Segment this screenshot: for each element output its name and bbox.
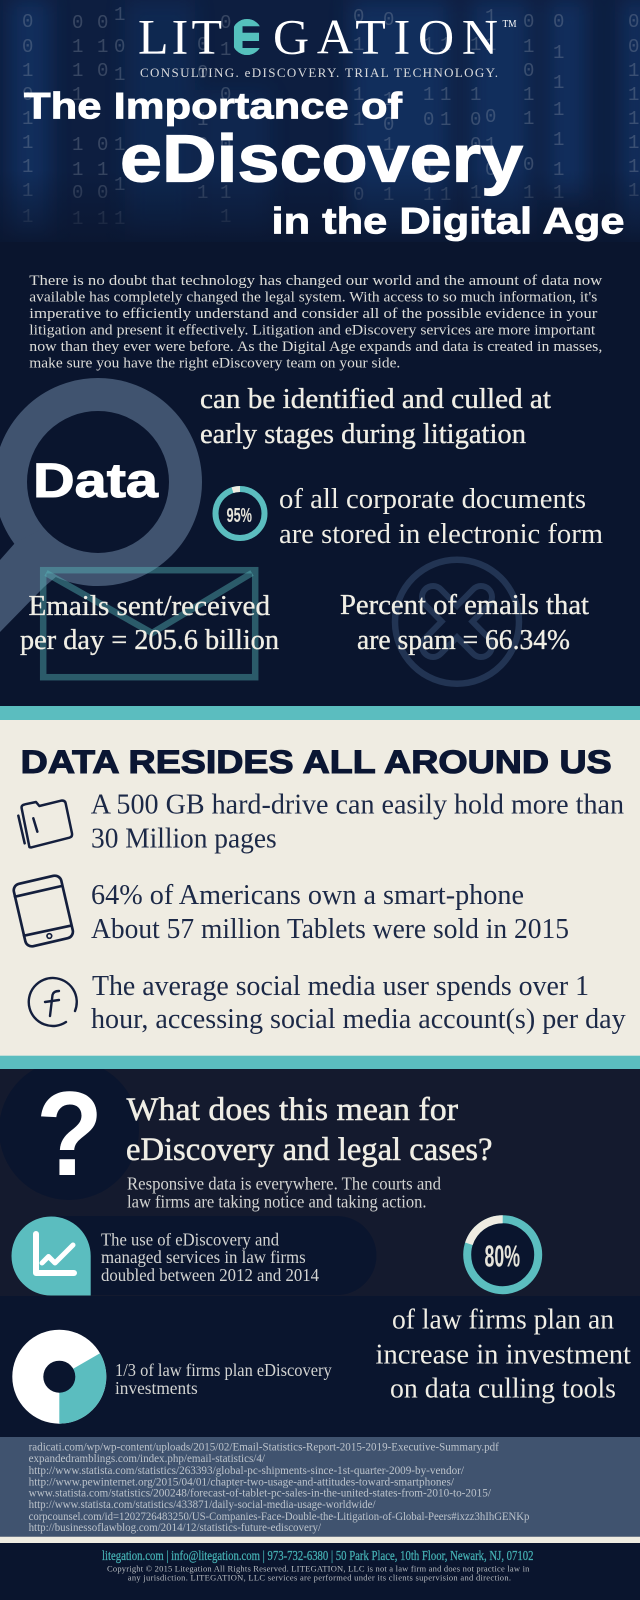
donut chart: 80%: 80% bbox=[484, 1239, 520, 1274]
panel: sources: http://www.statista.com/statistics/433871/daily-social-media-usage-worldwide/ bbox=[29, 1497, 376, 1511]
panel: header with binary background: 101111 bbox=[114, 4, 125, 230]
text: one third of law firms: investments bbox=[115, 1378, 198, 1398]
panel: sources: http://www.pewinternet.org/2015/04/01/chapter-two-usage-and-attitudes-toward-smartphones/ bbox=[29, 1475, 455, 1489]
icon: tablet bbox=[12, 874, 74, 948]
icon: envelope bbox=[43, 570, 255, 677]
text block: introduction: make sure you have the right eDiscovery team on your side. bbox=[29, 356, 400, 372]
text block: introduction bbox=[29, 273, 602, 372]
text: responsive data bbox=[127, 1174, 441, 1212]
heading: what does this mean: What does this mean for bbox=[126, 1092, 458, 1128]
donut chart: 80% bbox=[464, 1216, 542, 1294]
text: investment in culling tools: increase in investment bbox=[376, 1338, 631, 1370]
text: emails per day: per day = 205.6 billion bbox=[20, 624, 279, 656]
panel: footer: Copyright © 2015 Litegation All Rights Reserved. LITEGATION, LLC is not a law firm and does not practice law in bbox=[107, 1564, 530, 1574]
text: social media: hour, accessing social media account(s) per day bbox=[91, 1003, 626, 1035]
panel: footer bbox=[102, 1548, 534, 1583]
divider band: teal lower bbox=[0, 1056, 640, 1069]
text block: introduction: There is no doubt that technology has changed our world and the amount of data now bbox=[29, 273, 602, 289]
panel: header with binary background bbox=[0, 0, 640, 242]
panel: header with binary background: 00111111 bbox=[628, 11, 639, 202]
panel: header with binary background: 01110 bbox=[353, 6, 364, 206]
text: spam percentage bbox=[340, 589, 589, 656]
donut chart: 95%: 95% bbox=[226, 505, 252, 527]
panel: header with binary background: 0100101 bbox=[97, 12, 108, 230]
panel: header with binary background: 11011 bbox=[423, 34, 434, 206]
logo: GATION bbox=[273, 8, 498, 64]
panel: header with binary background: 0111111 bbox=[553, 11, 564, 204]
panel: footer: any jurisdiction. LITEGATION, LLC services are performed under its clients supervision and direction. bbox=[128, 1573, 511, 1583]
panel: what does this mean bbox=[0, 1060, 640, 1296]
panel: header with binary background: 01011 bbox=[383, 9, 394, 206]
logo: LIT bbox=[138, 8, 222, 64]
text: hard drive: 30 Million pages bbox=[91, 822, 277, 854]
logo bbox=[139, 19, 516, 77]
pie chart: one third bbox=[12, 1330, 106, 1424]
panel: header with binary background: 00101 bbox=[197, 34, 208, 204]
heading: what does this mean bbox=[126, 1092, 492, 1168]
text block: introduction: now than they ever were before. As the Digital Age expands and data is created in masses, bbox=[29, 339, 602, 355]
text: smartphones and tablets: 64% of Americans own a smart-phone bbox=[91, 879, 524, 911]
text block: introduction: imperative to efficiently understand and consider all of the possible evidence in your bbox=[29, 306, 597, 322]
icon: facebook circle bbox=[29, 978, 77, 1026]
text: identified and culled: can be identified and culled at bbox=[200, 383, 551, 415]
text: smartphones and tablets: About 57 million Tablets were sold in 2015 bbox=[91, 913, 569, 945]
text: spam percentage: are spam = 66.34% bbox=[357, 624, 570, 656]
panel: footer: litegation.com | info@litegation.com | 973-732-6380 | 50 Park Place, 10th Floor, Newark, NJ, 07102 bbox=[102, 1548, 534, 1563]
text: social media: The average social media user spends over 1 bbox=[92, 970, 589, 1002]
text: responsive data: Responsive data is everywhere. The courts and bbox=[127, 1174, 441, 1194]
text: smartphones and tablets bbox=[91, 879, 569, 945]
panel: sources bbox=[0, 1437, 640, 1537]
text: identified and culled bbox=[200, 383, 551, 450]
text: hard drive bbox=[91, 788, 624, 854]
panel: header with binary background: 0101101 bbox=[523, 11, 534, 204]
panel: sources: corpcounsel.com/id=1202726483250/US-Companies-Face-Double-the-Litigation-of-Global-Peers#ixzz3hIhGENKp bbox=[29, 1509, 529, 1523]
icon: question mark bbox=[0, 1060, 139, 1201]
text: corporate documents bbox=[279, 483, 603, 550]
panel: header with binary background: 1111 bbox=[440, 34, 451, 206]
heading: data resides: DATA RESIDES ALL AROUND US bbox=[21, 744, 612, 780]
text block: introduction: available has completely changed the legal system. With access to so much information, it's bbox=[29, 290, 597, 306]
panel: data resides all around us bbox=[0, 720, 640, 1056]
title: in the Digital Age bbox=[272, 200, 624, 241]
title: The Importance of bbox=[24, 85, 403, 126]
text: responsive data: law firms are taking notice and taking action. bbox=[127, 1192, 426, 1212]
panel: header with binary background: 010011 bbox=[220, 12, 231, 228]
text: corporate documents: of all corporate documents bbox=[279, 483, 586, 515]
logo: TM bbox=[502, 19, 517, 30]
heading: what does this mean: eDiscovery and legal cases? bbox=[126, 1132, 492, 1168]
text: spam percentage: Percent of emails that bbox=[340, 589, 589, 621]
callout: eDiscovery use doubled: doubled between 2012 and 2014 bbox=[101, 1265, 319, 1285]
text: emails per day: Emails sent/received bbox=[28, 590, 271, 622]
panel: header with binary background: 01111101 bbox=[72, 12, 83, 230]
text: corporate documents: are stored in electronic form bbox=[279, 518, 603, 550]
text: one third of law firms: 1/3 of law firms plan eDiscovery bbox=[115, 1360, 332, 1380]
panel: sources: radicati.com/wp/wp-content/uploads/2015/02/Email-Statistics-Report-2015-2019-Executive-Summary.pdf bbox=[29, 1440, 499, 1454]
panel: sources: www.statista.com/statistics/200248/forecast-of-tablet-pc-sales-in-the-united-states-from-2010-to-2015/ bbox=[29, 1486, 492, 1500]
title bbox=[24, 85, 624, 241]
heading: Data: Data bbox=[33, 455, 158, 508]
icon: question mark: ? bbox=[36, 1067, 103, 1201]
divider band: cream bbox=[0, 1537, 640, 1543]
logo: E bbox=[232, 9, 262, 67]
icon: spam circle with X bbox=[395, 560, 519, 684]
callout: eDiscovery use doubled: managed services in law firms bbox=[101, 1247, 306, 1267]
callout: eDiscovery use doubled bbox=[12, 1216, 376, 1296]
panel: sources: http://www.statista.com/statistics/263393/global-pc-shipments-since-1st-quarter-2009-by-vendor/ bbox=[29, 1463, 465, 1477]
donut chart: 95% bbox=[216, 489, 264, 538]
callout: eDiscovery use doubled: The use of eDiscovery and bbox=[101, 1230, 279, 1250]
panel: header with binary background: 11001 bbox=[470, 34, 481, 204]
icon: chart badge bbox=[12, 1216, 91, 1296]
panel: data statistics bbox=[0, 383, 603, 684]
text block: introduction: litigation and present it effectively. Litigation and eDiscovery services are more important bbox=[29, 322, 596, 338]
text: one third of law firms bbox=[115, 1360, 332, 1398]
icon: folder bbox=[18, 801, 72, 847]
icon: magnifying glass bbox=[0, 394, 186, 632]
text: identified and culled: early stages during litigation bbox=[200, 418, 526, 450]
divider band: teal bbox=[0, 706, 640, 720]
panel: header with binary background: 11010 bbox=[485, 6, 496, 181]
text: hard drive: A 500 GB hard-drive can easily hold more than bbox=[91, 788, 624, 820]
panel: sources: http://businessoflawblog.com/2014/12/statistics-future-ediscovery/ bbox=[29, 1520, 322, 1534]
text: social media bbox=[91, 970, 626, 1035]
logo: CONSULTING. eDISCOVERY. TRIAL TECHNOLOGY. bbox=[140, 65, 498, 80]
text: investment in culling tools: on data culling tools bbox=[390, 1372, 616, 1404]
panel: header with binary background: 001011111 bbox=[22, 11, 33, 228]
text: investment in culling tools: of law firms plan an bbox=[392, 1304, 614, 1336]
text: investment in culling tools bbox=[376, 1304, 631, 1404]
title: eDiscovery bbox=[120, 122, 523, 197]
text: emails per day bbox=[20, 590, 279, 656]
panel: sources: expandedramblings.com/index.php/email-statistics/4/ bbox=[29, 1451, 266, 1465]
